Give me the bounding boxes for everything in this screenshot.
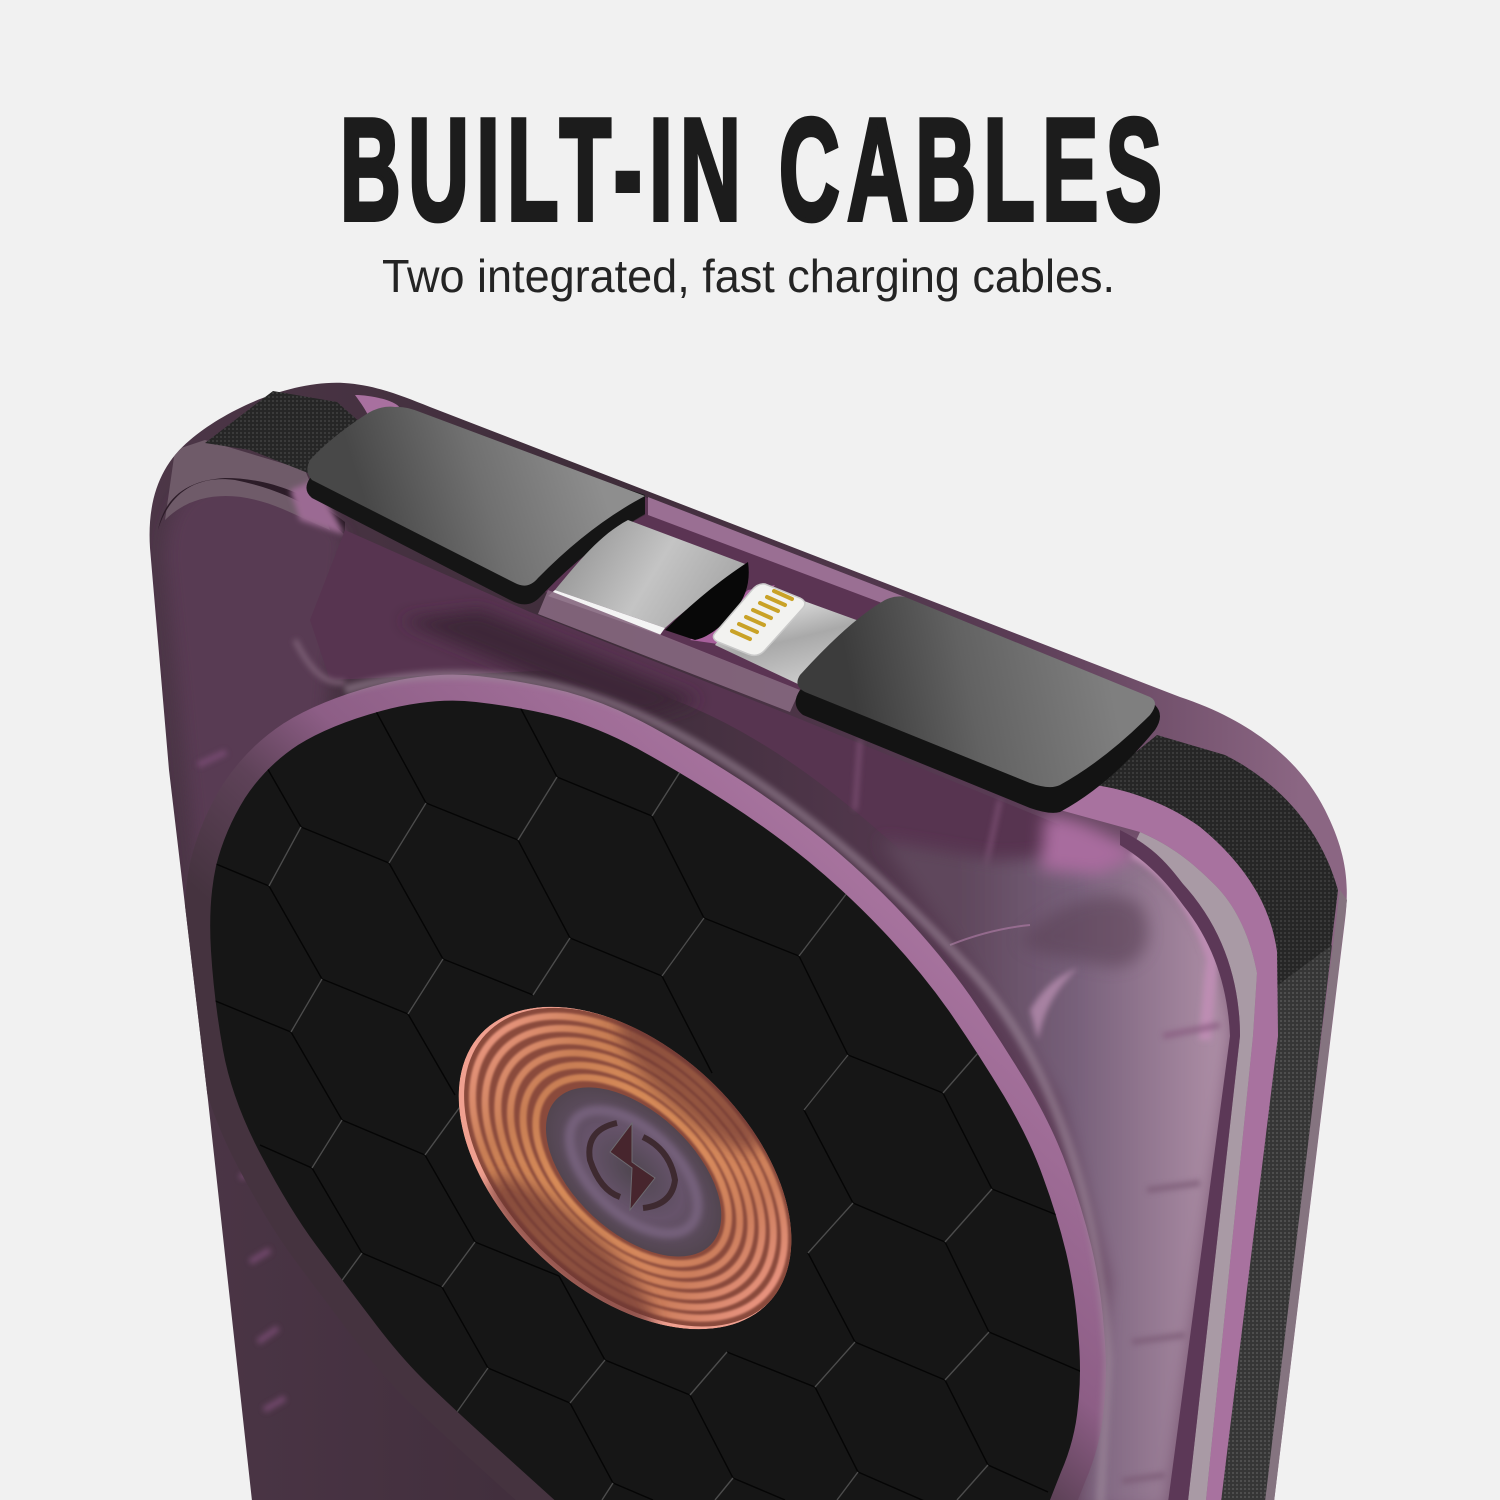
fabric strap lower lighter [1220, 945, 1332, 1500]
channel behind connectors [545, 497, 905, 690]
coil centre [515, 1056, 752, 1288]
pink frame band [1060, 785, 1278, 1500]
disc rim [210, 675, 1108, 1500]
light frame strip [1133, 832, 1257, 1500]
fabric strap top left [205, 391, 362, 473]
gold pins [732, 591, 792, 639]
right cap [796, 596, 1160, 813]
title: BUILT-IN CABLES [340, 90, 1162, 251]
copper wireless charging coil [458, 1006, 792, 1330]
front clear bar [538, 590, 800, 712]
right inner field [880, 840, 1232, 1500]
channel upper strip [648, 497, 905, 606]
side chevrons [198, 752, 1220, 1481]
grey outer side strip [1262, 890, 1347, 1500]
dark groove [1120, 830, 1240, 1500]
left cap [306, 407, 645, 604]
USB-C connector [548, 520, 749, 640]
subtitle: Two integrated, fast charging cables. [382, 250, 1115, 302]
coil rings [458, 1006, 792, 1330]
device body [150, 383, 1347, 1500]
black hexagon disc [210, 701, 1080, 1500]
coil top and bottom shading [610, 1021, 763, 1160]
charging logo [589, 1123, 675, 1210]
pink gap between connectors [690, 585, 775, 645]
body shading and highlights [158, 395, 1232, 1500]
fabric strap right [1095, 735, 1338, 1500]
power bank device [150, 383, 1347, 1500]
Lightning connector [713, 584, 862, 685]
hexagon grid lines [213, 704, 1082, 1500]
rim highlight [345, 675, 1108, 1500]
